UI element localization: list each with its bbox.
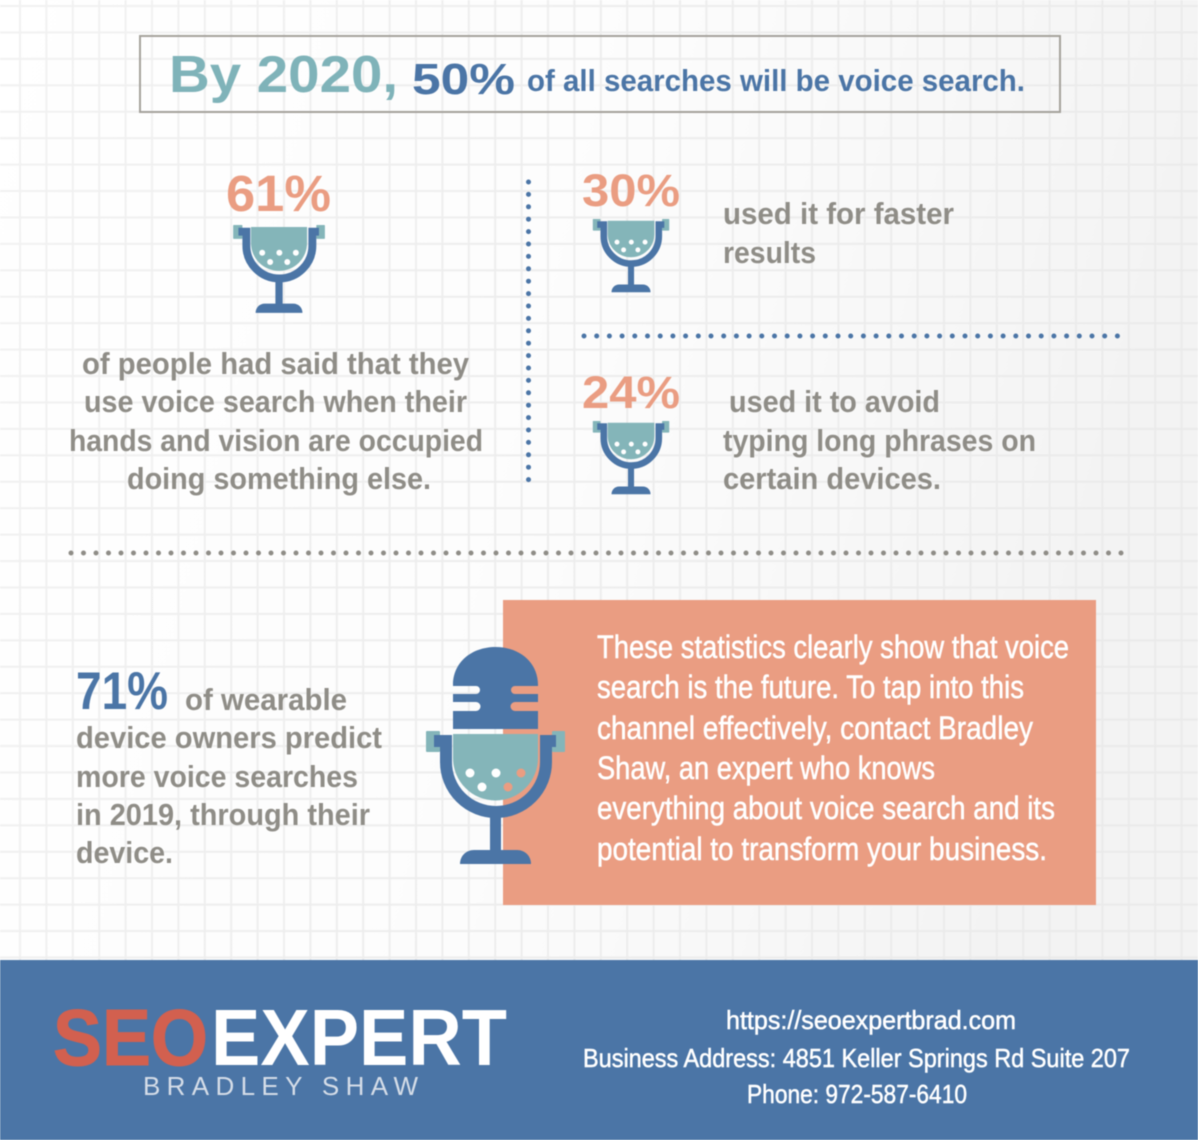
title: 50%: 50% [412,55,515,104]
number: 61%: 61% [226,165,331,222]
contact details: Phone: 972-587-6410 [747,1079,967,1109]
callout text [597,629,1069,867]
panel: 24% stat [582,367,1036,496]
text: 24% description: certain devices. [723,461,941,496]
logo: SEO EXPERT: SEO [53,993,208,1082]
panel: 30% stat [582,165,954,292]
text: 71% description: device owners predict [76,720,382,755]
text: 24% description [723,384,1036,496]
text: 71% description: in 2019, through their [76,797,370,832]
panel: 71% stat [76,662,382,870]
icon: microphone cup [233,225,325,313]
contact details: https://seoexpertbrad.com [726,1005,1016,1035]
text: 24% description: typing long phrases on [723,423,1036,458]
callout text: channel effectively, contact Bradley [597,710,1033,746]
number: 71%: 71% [76,662,168,721]
text: 61% description: of people had said that they [82,346,470,381]
callout text: everything about voice search and its [597,790,1055,826]
text: 71% description [76,682,382,870]
text: 71% description: more voice searches [76,759,358,794]
text: 61% description [69,346,483,496]
text: 61% description: doing something else. [127,461,431,496]
callout text: potential to transform your business. [597,831,1047,867]
callout text: Shaw, an expert who knows [597,750,935,786]
text: 30% description: used it for faster [723,196,954,231]
icon: large microphone [426,647,565,864]
text: 61% description: hands and vision are occupied [69,423,483,458]
icon: microphone cup [593,421,669,494]
title: by 2020: By 2020, [169,46,398,104]
logo: Bradley Shaw: BRADLEY SHAW [143,1071,418,1101]
icon: microphone cup [593,219,669,292]
text: 30% description: results [723,235,816,270]
text: 30% description [723,196,954,270]
logo: SEO EXPERT [53,993,507,1082]
contact details: Business Address: 4851 Keller Springs Rd Suite 207 [583,1043,1130,1073]
callout text: search is the future. To tap into this [597,669,1024,705]
panel: 61% stat [69,165,483,496]
text: 24% description: used it to avoid [729,384,940,419]
contact details [583,1005,1130,1109]
number: 24%: 24% [582,367,680,418]
text: 71% description: of wearable [185,682,347,717]
number: 30%: 30% [582,165,680,216]
title box [140,36,1060,112]
title: remainder: of all searches will be voice search. [527,63,1025,98]
footer band [0,960,1198,1140]
callout panel [503,600,1096,905]
text: 71% description: device. [76,835,173,870]
text: 61% description: use voice search when their [84,384,467,419]
callout text: These statistics clearly show that voice [597,629,1069,665]
logo: SEO EXPERT: EXPERT [211,993,507,1082]
